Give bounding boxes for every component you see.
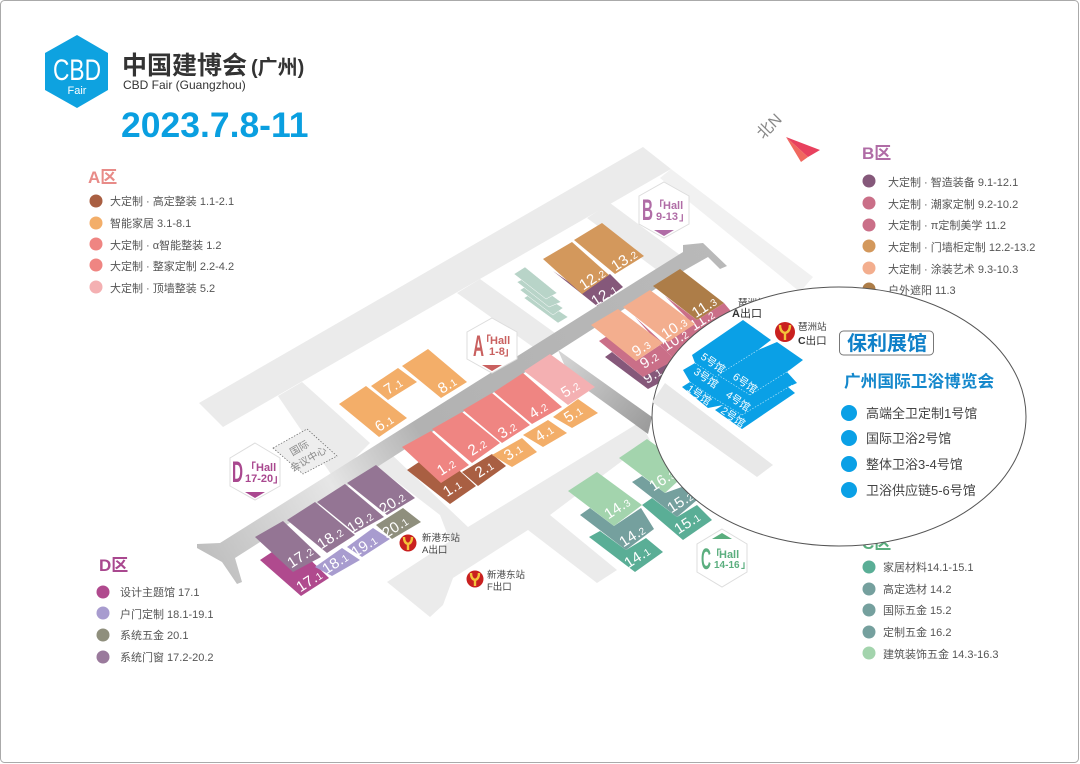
badge: C hall 14-16: Hall [719,549,739,561]
legend: zone B: 大定制 · 潮家定制 9.2-10.2 [888,197,1018,211]
hall 4.2 [494,373,562,424]
hall 15.2: 15.2 [664,488,697,517]
legend: zone C [862,534,999,661]
street inside lens [652,383,773,477]
hall 1.2: 1.2 [434,455,459,480]
legend: zone B: B区 [862,144,891,163]
hall 9.1: 9.1 [640,363,665,388]
hall 4.1 [523,420,567,447]
legend: zone A [88,168,234,295]
hall 11.2: 11.2 [687,306,718,335]
hall 2: 2号馆 [718,404,748,430]
hall 3.2: 3.2 [495,418,520,443]
legend: zone D: D区 [99,556,128,575]
lens: Poly exhibition hall [652,287,1026,546]
hall 6.1 [339,386,407,437]
legend: zone D: 户门定制 18.1-19.1 [120,607,214,621]
blue hall silhouette [682,320,803,429]
hall 14.1: 14.1 [621,543,654,572]
badge: C hall 14-16: 」 [741,560,751,571]
legend: zone B: 大定制 · 涂装艺术 9.3-10.3 [888,262,1018,276]
hall 3.1: 3.1 [501,440,526,465]
zone C halls [568,439,712,572]
hall 11.3: 11.3 [689,293,720,322]
hall 12.1: 12.1 [588,281,621,310]
lens legend: 整体卫浴3-4号馆 [866,457,963,472]
title city: (广州) [251,56,304,79]
metro label behind lens: Pazhou: 琶洲站 [738,297,767,309]
lens ellipse [652,287,1026,546]
hall 16.3 [619,439,690,495]
hall 2.2: 2.2 [465,435,490,460]
legend: zone A: 大定制 · 整家定制 2.2-4.2 [110,259,234,273]
roads: site street network [199,147,813,617]
hall 5.1: 5.1 [561,402,586,427]
legend: zone C: 高定选材 14.2 [883,582,951,596]
hall 17.2 [255,521,321,572]
lens legend: 高端全卫定制1号馆 [866,406,977,421]
hall 14.3 [568,472,642,526]
legend: zone B: 大定制 · 门墙柜定制 12.2-13.2 [888,240,1035,254]
hall 1.2 [402,431,469,483]
hall 14.1 [589,531,663,572]
logo hexagon [45,35,108,108]
metro: Pazhou station exit C: C出口 [798,334,827,347]
hall 11.2 [665,296,735,338]
badge: B hall 9-13: 9-13 [656,211,678,223]
hall 10.2 [635,317,710,362]
legend: zone C: 定制五金 16.2 [883,625,951,639]
zone B halls [514,223,735,389]
hall 3.2 [463,393,530,443]
bath expo heading: 广州国际卫浴博览会 [844,371,994,391]
metro: Pazhou station exit C [775,321,827,347]
hall 2.1 [462,454,506,486]
metro: Xingang East station exit F [466,569,526,593]
hall 6.1: 6.1 [372,411,397,436]
legend: zone A: 大定制 · α智能整装 1.2 [110,238,221,252]
metro: Xingang East station exit A: 新港东站 [422,532,461,544]
north arrow: 北N [753,110,786,143]
international conference centre: 会议中心 [288,443,329,475]
hall 14.3: 14.3 [601,494,634,523]
badge: A hall 1-8: A [473,330,484,363]
badge: D hall 17-20: 」 [273,473,284,485]
metro: Xingang East station exit A [400,532,461,556]
hall 19.1 [347,528,390,561]
hall 4: 4号馆 [723,388,753,414]
hall 20.1 [376,508,421,542]
badge: D hall 17-20: 「 [245,461,256,474]
lens legend [841,405,977,498]
metro: Pazhou station exit C: 琶洲站 [798,321,827,333]
hall 2.1: 2.1 [472,457,497,482]
badge: B hall 9-13: Hall [663,200,683,212]
metro: Xingang East station exit F: 新港东站 [487,569,526,581]
legend: zone D: 设计主题馆 17.1 [120,585,199,599]
legend: zone B: 大定制 · π定制美学 11.2 [888,218,1006,232]
title Chinese: 中国建博会 [122,52,247,80]
legend: zone D: 系统五金 20.1 [120,628,188,642]
legend: zone C: 国际五金 15.2 [883,603,951,617]
hall 12.1 [553,271,623,310]
hall 19.1: 19.1 [348,532,381,561]
hall 12.2: 12.2 [576,265,609,294]
badge: D hall 17-20 [230,443,284,500]
hall 9.2: 9.2 [637,348,662,373]
badge: D hall 17-20: 17-20 [245,473,273,485]
badge: A hall 1-8: 「 [480,334,491,347]
legend: zone A: 智能家居 3.1-8.1 [110,216,191,230]
badge: A hall 1-8 [467,318,517,373]
hall 10.3: 10.3 [658,314,691,343]
legend: zone A: 大定制 · 顶墙整装 5.2 [110,281,215,295]
legend: zone A: A区 [88,168,117,187]
legend: zone B [862,144,1035,297]
legend: zone D: 系统门窗 17.2-20.2 [120,650,214,664]
hall 5.2 [524,354,595,405]
logo hexagon: CBD [53,54,101,87]
hall 18.2: 18.2 [314,524,347,553]
hall 20.1: 20.1 [379,513,412,542]
hall 17.1: 17.1 [293,567,326,596]
lens legend: 卫浴供应链5-6号馆 [866,483,976,498]
hall 9.3: 9.3 [629,336,654,361]
hall 14.2: 14.2 [616,522,649,551]
main road [197,243,727,584]
title English: CBD Fair (Guangzhou) [123,78,246,92]
hall 10.3 [623,290,695,343]
Pazhou exit A label: A出口 [732,306,762,320]
international conference centre: 国际 [288,438,311,459]
logo hexagon: Fair [68,85,87,97]
hall 1.1: 1.1 [440,476,465,501]
hall 13.2: 13.2 [608,246,641,275]
blue halls [682,320,803,430]
hall 9.3 [591,309,663,361]
badge: D hall 17-20: Hall [256,462,276,474]
hall 8.1: 8.1 [435,373,460,398]
badge: B hall 9-13: 」 [679,211,690,223]
legend: zone C: 建筑装饰五金 14.3-16.3 [883,647,999,661]
hall 20.2 [347,465,415,518]
legend: zone C: C区 [862,534,891,553]
unlabelled pale green stack [514,267,568,323]
side road [558,350,652,434]
badge: A hall 1-8: Hall [490,335,510,347]
badge: B hall 9-13: B [642,194,653,227]
hall 20.2: 20.2 [376,489,409,518]
zone D halls [255,465,421,596]
hall 3.1 [492,438,537,467]
hall 15.1 [642,498,712,540]
legend: zone A: 大定制 · 高定整装 1.1-2.1 [110,194,234,208]
metro: Xingang East station exit A: A出口 [422,544,447,556]
hall 1: 1号馆 [684,382,714,408]
hall 19.2 [317,484,384,537]
hall 16.3: 16.3 [646,466,679,495]
hall 10.2: 10.2 [659,326,692,355]
hall 12.2 [543,242,609,294]
badge: B hall 9-13: 「 [653,199,664,212]
badge: C hall 14-16: 14-16 [714,560,740,571]
hall 9.2 [599,335,675,377]
Poly hall title box: 保利展馆 [847,332,927,355]
legend: zone B: 大定制 · 智造装备 9.1-12.1 [888,175,1018,189]
badge: A hall 1-8: 」 [504,346,515,358]
hall 17.1 [260,540,329,596]
hall dividers [690,350,792,415]
legend: zone D [96,556,214,664]
hall 7.1: 7.1 [381,374,406,399]
hall 4.2: 4.2 [526,398,551,423]
hall 1.1 [407,450,476,504]
hall 5.1 [553,399,598,428]
badge: C hall 14-16: 「 [710,548,721,561]
hall 9.1 [605,352,680,389]
hall 18.1 [315,548,360,578]
hall 8.1 [402,349,467,398]
hall 2.2 [432,412,500,463]
legend: zone C: 家居材料14.1-15.1 [883,560,973,574]
hall 5: 5号馆 [698,350,728,376]
badge: A hall 1-8: 1-8 [489,346,505,358]
hall 18.1: 18.1 [319,549,352,578]
lens legend: 国际卫浴2号馆 [866,431,951,446]
hall 13.2 [574,223,644,275]
date: 2023.7.8-11 [121,105,309,145]
legend: zone B: 户外遮阳 11.3 [888,283,956,297]
zone A halls [339,349,598,504]
badge: C hall 14-16 [697,529,751,587]
badge: C hall 14-16: C [701,543,711,576]
hall 6: 6号馆 [730,370,760,396]
metro: Xingang East station exit F: F出口 [487,581,512,593]
hall 19.2: 19.2 [344,508,377,537]
hall 5.2: 5.2 [558,377,583,402]
hall 17.2: 17.2 [284,543,317,572]
hall 18.2 [287,502,355,553]
north arrow [753,110,820,162]
badge: B hall 9-13 [639,182,690,238]
international conference centre [273,429,337,475]
hall 7.1 [371,368,417,400]
badge: D hall 17-20: D [232,456,243,489]
hall 15.2 [632,476,697,517]
header [45,35,309,145]
hall 14.2 [580,508,654,551]
hall 3: 3号馆 [691,365,721,391]
hall 15.1: 15.1 [671,509,704,538]
hall 11.3 [653,269,724,322]
hall 4.1: 4.1 [532,421,557,446]
